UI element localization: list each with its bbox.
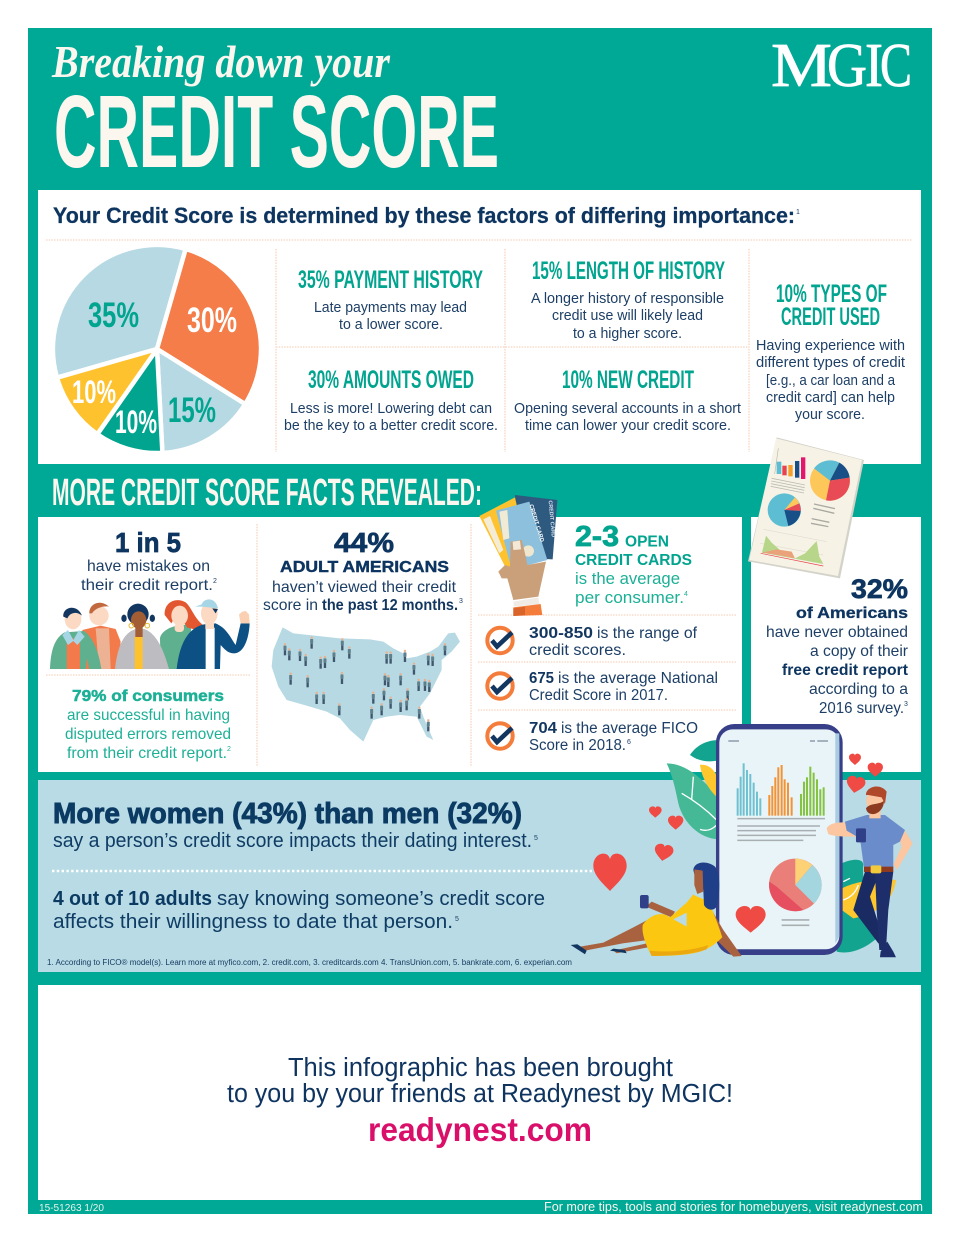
fact: 32 percent of Americans: of Americans [796, 605, 908, 622]
fact: 1 in 5: 1 in 5 [115, 527, 181, 558]
fact: 32 percent of Americans: a copy of their [810, 643, 909, 660]
heading: factors: Your Credit Score is determined by these factors of differing importance: [53, 203, 795, 228]
fact: 44 percent [263, 527, 463, 614]
fact: FICO average: Score in 2018. [529, 737, 626, 754]
panel: readynest message: to you by your friends at Readynest by MGIC! [227, 1080, 733, 1108]
factor: payment history: to a lower score. [339, 317, 443, 333]
factor: length of history: credit use will likely lead [552, 308, 703, 324]
text: 4 out of 10 adults [53, 888, 545, 933]
panel: dating [38, 780, 921, 972]
illustration: hand holding credit cards: CREDIT CARD [547, 500, 556, 538]
footnotes: 1. According to FICO® model(s). Learn more at myfico.com, 2. credit.com, 3. creditcards.com 4. TransUnion.com, 5. bankrate.com, 6. experian.com [47, 958, 572, 967]
fact: national average: 675 [529, 670, 554, 687]
logo: MGIC: C [880, 32, 912, 100]
factor: payment history: 35% PAYMENT HISTORY [298, 266, 483, 294]
heading: factors: 1 [796, 209, 800, 216]
fact: 2-3 open credit cards: 4 [684, 591, 688, 598]
icon: check mark [487, 723, 513, 749]
panel: readynest message: readynest.com [368, 1111, 592, 1148]
fact: 2-3 open credit cards: CREDIT CARDS [575, 552, 692, 569]
illustration: hand holding credit cards: CREDIT CARD [527, 504, 545, 543]
fact: 32 percent of Americans: 32% [851, 574, 908, 604]
title [51, 37, 499, 189]
fact: 2-3 open credit cards: per consumer. [575, 588, 684, 607]
text: 4 out of 10 adults: 5 [455, 916, 459, 923]
illustration: couple with phone [571, 724, 913, 957]
fact: 32 percent of Americans: 3 [904, 701, 908, 708]
fact: 32 percent of Americans: have never obtained [766, 624, 908, 641]
fact: score range: is the range of [597, 625, 698, 642]
fact: 79 percent of consumers [65, 688, 231, 762]
fact: 2-3 open credit cards: OPEN [625, 534, 669, 550]
factor: length of history [531, 257, 725, 342]
panel: 32 percent [751, 517, 921, 772]
fact: 2-3 open credit cards: 2-3 [575, 521, 619, 553]
map: people across the US [272, 627, 460, 742]
text: dating interest: 5 [534, 835, 538, 842]
leaves [667, 740, 896, 953]
panel: readynest message: This infographic has been brought [288, 1054, 673, 1082]
pie chart: 15% [168, 391, 216, 430]
factor: payment history [298, 266, 483, 333]
fact: FICO average: is the average FICO [561, 720, 698, 737]
text: 4 out of 10 adults: say knowing someone’s credit score [217, 888, 545, 910]
fact: 79 percent of consumers: are successful in having [67, 707, 230, 724]
fact: 79 percent of consumers: 2 [227, 746, 231, 753]
fact: score range: credit scores. [529, 642, 626, 659]
man [827, 787, 913, 957]
fact: score range [487, 625, 698, 659]
hearts [593, 754, 883, 891]
fact: 44 percent: haven’t viewed their credit [272, 579, 457, 596]
fact: 79 percent of consumers: 79% of consumers [72, 688, 224, 705]
factor: types of credit: different types of credit [756, 355, 905, 371]
text: dating interest: say a person’s credit score impacts their dating interest. [53, 830, 532, 852]
fact: national average: Credit Score in 2017. [529, 687, 668, 704]
pie chart: 10% [115, 404, 157, 440]
footer: For more tips, tools and stories for homebuyers, visit readynest.com [544, 1200, 923, 1214]
fact: national average: is the average National [558, 670, 718, 687]
fact: 44 percent: ADULT AMERICANS [280, 559, 449, 576]
panel: credit score factors [38, 190, 921, 464]
factor: payment history: Late payments may lead [314, 300, 467, 316]
factor: new credit: 10% NEW CREDIT [562, 366, 694, 394]
factor: amounts owed: be the key to a better credit score. [284, 418, 498, 434]
fact: 79 percent of consumers: disputed errors removed [65, 726, 231, 743]
icon: check mark [487, 673, 513, 699]
pie chart: 10% [72, 374, 116, 410]
factor: types of credit [756, 280, 905, 423]
illustration: report document [748, 437, 864, 578]
fact: 2-3 open credit cards: is the average [575, 569, 680, 588]
phone [716, 724, 843, 955]
fact: score range: 300-850 [529, 625, 593, 642]
pie chart: 35% [88, 296, 139, 335]
factor: amounts owed: 30% AMOUNTS OWED [308, 366, 474, 394]
fact: FICO average [487, 720, 698, 754]
fact: FICO average: 704 [529, 720, 557, 737]
panel: readynest message [38, 985, 921, 1200]
illustration: group of people [50, 599, 250, 669]
fact: 1 in 5 [81, 527, 217, 594]
text: 4 out of 10 adults: 4 out of 10 adults [53, 888, 212, 910]
fact: 79 percent of consumers: from their credit report. [67, 745, 227, 762]
panel: facts [38, 517, 742, 772]
fact: 44 percent: score in [263, 597, 318, 614]
footer: 15-51263 1/20 [39, 1203, 104, 1214]
fact: 32 percent of Americans [766, 574, 909, 717]
factor: types of credit: your score. [795, 407, 865, 423]
factor: length of history: 15% LENGTH OF HISTORY [532, 257, 725, 285]
pie chart: 30% [187, 301, 237, 340]
fact: 32 percent of Americans: free credit report [782, 662, 909, 679]
fact: 2-3 open credit cards [575, 521, 692, 607]
heading: more facts: MORE CREDIT SCORE FACTS REVEALED: [52, 472, 482, 514]
fact: 1 in 5: have mistakes on [87, 558, 210, 575]
title: Breaking down your [51, 37, 390, 87]
fact: 1 in 5: their credit report. [81, 577, 213, 594]
pie chart [53, 245, 261, 453]
factor: new credit: Opening several accounts in a short [514, 401, 741, 417]
fact: FICO average: 6 [627, 739, 631, 746]
icon: check mark [487, 628, 513, 653]
title: CREDIT SCORE [54, 74, 499, 189]
illustration: hand holding credit cards [479, 495, 557, 616]
factor: types of credit: Having experience with [756, 338, 905, 354]
woman [571, 863, 742, 957]
factor: types of credit: [e.g., a car loan and a [766, 373, 896, 389]
footer [39, 1200, 923, 1214]
logo: MGIC: G [827, 32, 867, 100]
factor: length of history: A longer history of responsible [531, 291, 724, 307]
factor: types of credit: CREDIT USED [781, 303, 880, 331]
fact: 44 percent: 3 [459, 598, 463, 605]
fact: 32 percent of Americans: 2016 survey. [819, 700, 904, 717]
factor: amounts owed: Less is more! Lowering debt can [290, 401, 492, 417]
factor: length of history: to a higher score. [573, 326, 682, 342]
fact: national average [487, 670, 718, 704]
text: 4 out of 10 adults: affects their willingness to date that person. [53, 911, 453, 933]
fact: 44 percent: the past 12 months. [322, 597, 458, 614]
fact: 44 percent: 44% [334, 527, 394, 558]
heading: women vs men: More women (43%) than men (32%) [53, 798, 522, 830]
factor: types of credit: credit card] can help [766, 390, 895, 406]
logo: MGIC [771, 32, 912, 100]
factor: new credit: time can lower your credit score. [525, 418, 731, 434]
logo: MGIC: I [865, 32, 883, 100]
logo: MGIC: M [771, 32, 832, 100]
fact: 1 in 5: 2 [213, 578, 217, 585]
factor: new credit [514, 366, 741, 434]
factor: types of credit: 10% TYPES OF [776, 280, 887, 308]
fact: 32 percent of Americans: according to a [809, 681, 908, 698]
factor: amounts owed [284, 366, 498, 434]
